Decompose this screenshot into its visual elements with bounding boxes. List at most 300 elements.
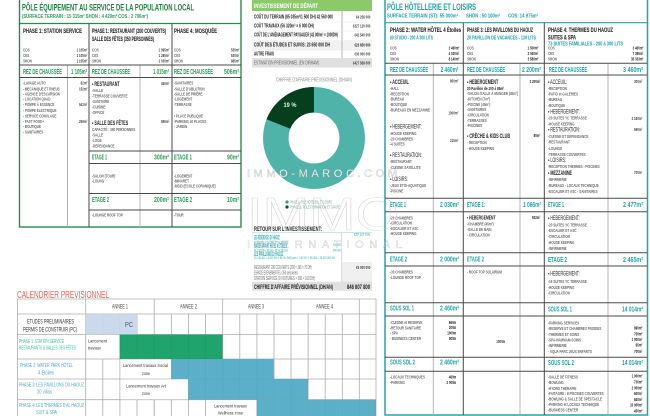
chart: chiffre d'affaire prévisionnel donut: 19 % (284, 103, 297, 109)
column: phase 1 restaurant et salle des fêtes: COS (92, 47, 99, 53)
column: phase 4 thermes du haouz (548, 27, 644, 414)
column: phase 4 mosquée: -MINARET (174, 178, 189, 184)
column: phase 4 thermes du haouz: 2 477m² (623, 202, 644, 209)
white merged note cells (120, 359, 257, 416)
row labels: SUIT & SPA (36, 410, 58, 416)
watermark: IMMO-MAROC.COM (247, 168, 397, 180)
column: phase 1 restaurant et salle des fêtes: -SANITAIRE (92, 98, 110, 104)
panel: retour sur investissement: STATION SERVICE (0 VOITURES × 365 × 100 DH) (254, 276, 315, 282)
column: phase 3 les pavillons du haouz: - CIRCULATION (467, 232, 490, 238)
column: phase 1 station service: COS (23, 47, 30, 53)
column: phase 2 water hôtel: CES (390, 50, 397, 56)
column: phase 4 thermes du haouz: -RESTAURANT (548, 139, 570, 145)
column: phase 4 mosquée (174, 26, 240, 218)
column: phase 2 water hôtel: 660m (449, 319, 457, 325)
panel: retour sur investissement: 20 VILLAS × 5 000 DH × 65 %× 365 jours + 130 000 + 65 000 = 30 000 000 DH (254, 256, 335, 260)
column: phase 2 water hôtel: 2 460m² (440, 67, 459, 74)
column: phase 1 restaurant et salle des fêtes: CAPACITÉ : 350 PERSONNES (92, 126, 136, 132)
column: phase 4 thermes du haouz: -HOUSE KEEPING (548, 284, 575, 290)
column: phase 2 water hôtel: SHON (390, 56, 399, 62)
column: phase 4 thermes du haouz: -RECEPTION (548, 85, 567, 91)
column: phase 1 station service (23, 28, 88, 135)
column: phase 1 station service: 1 105m² (71, 69, 87, 76)
column: phase 2 water hôtel: ETAGE 1 (390, 202, 406, 209)
legend: pôles (285, 198, 340, 210)
column: phase 2 water hôtel: 2 000m (447, 379, 457, 385)
panel: investissement de départ: €23 650 000 (354, 42, 371, 48)
panel: retour sur investissement: LES RÉSIDENCES DU HAOUZ: (254, 234, 280, 242)
panel: investissement de départ: €427 589 000 (353, 60, 371, 66)
column: phase 4 mosquée: CES (174, 52, 181, 58)
column: phase 1 station service: - FAST FOOD+ (23, 118, 45, 124)
column: phase 4 thermes du haouz: -PARKING SERVICES (548, 320, 579, 326)
column: phase 3 les pavillons du haouz: 2 040m² (528, 50, 539, 56)
column: phase 4 thermes du haouz: 73 SUITES FAMILIALES - 200 à 300 LITS (548, 42, 623, 48)
year headers: ANNEE 1 (112, 304, 128, 310)
panel: retour sur investissement: RESTAURANT 200 COUVERTS (200 × 365 × 70 DH) (254, 265, 312, 271)
column: phase 4 thermes du haouz: 840m² (634, 396, 643, 402)
column: phase 2 water hôtel: - BUSINESS CENTER (390, 335, 421, 341)
column: phase 4 thermes du haouz: -INFIRMERIE (548, 176, 567, 182)
column: phase 1 restaurant et salle des fêtes: 1 015m² (153, 69, 169, 76)
heading: pôle équipement: PÔLE ÉQUIPEMENT AU SERVICE DE LA POPULATION LOCAL (22, 2, 194, 12)
column: phase 1 restaurant et salle des fêtes (92, 28, 170, 218)
heading: calendrier: CALENDRIER PREVISIONNEL (17, 290, 109, 301)
column: phase 1 restaurant et salle des fêtes: 1 095m² (159, 47, 170, 53)
column: phase 4 thermes du haouz: ▪ HEBERGEMENT: (548, 109, 580, 116)
column: phase 4 mosquée: -SALLE DE PRIÈRE (174, 91, 203, 97)
panel: pôle équipement (20, 0, 241, 227)
panel: investissement de départ: €30 000 000 (354, 51, 371, 57)
column: phase 1 station service: SHON (23, 58, 32, 64)
column: phase 1 restaurant et salle des fêtes: -CUISINE (92, 104, 106, 110)
column: phase 4 thermes du haouz: 890m² (634, 325, 643, 331)
panel: retour sur investissement: ETP 10T TAN (354, 232, 370, 237)
column: phase 4 thermes du haouz: ETAGE 1 (548, 202, 564, 209)
column: phase 2 water hôtel: ETAGE 2 (390, 256, 407, 264)
column: phase 4 mosquée: 90m² (227, 154, 239, 162)
column: phase 4 thermes du haouz: -PARKING et LOCAUX TECHNIQUE (548, 401, 599, 407)
gantt notes: PC (125, 322, 133, 329)
gantt notes: Lancement travaux (214, 404, 247, 410)
heading: pôle hôtellerie (387, 1, 538, 20)
column: phase 4 thermes du haouz: -THERMES ET SOINS (548, 331, 579, 337)
column: phase 4 thermes du haouz: -CIRCULATION (548, 233, 570, 239)
column: phase 1 station service: CES (23, 52, 30, 58)
panel: investissement de départ: AUTRE FRAIS (254, 52, 274, 58)
column: phase 3 les pavillons du haouz: - ROOF TOP SOLARIUM (467, 269, 502, 275)
column: phase 2 water hôtel: -BUREAU (390, 96, 404, 102)
column: phase 2 water hôtel: -CUISINE et RESERVE (390, 319, 423, 325)
row labels: 4 Étoiles (38, 370, 54, 376)
column: phase 1 restaurant et salle des fêtes: ▪ SALLE DES FÊTES (92, 118, 129, 127)
panel: investissement de départ: €42 540 000 (354, 32, 371, 38)
column: phase 4 thermes du haouz: PHASE 4: THERMES DU HAOUZ (548, 27, 613, 34)
column: phase 2 water hôtel: 2 000m² (440, 256, 459, 264)
row labels: PHASE 3: LES PAVILLONS DU HAOUZ (19, 382, 84, 388)
column: phase 3 les pavillons du haouz: -SANITAIRES (467, 106, 487, 112)
panel: retour sur investissement: CHIFFRE D'AFFAIRE PRÉVISIONNEL (DH/AN) (254, 283, 333, 291)
column: phase 4 mosquée: - JARDIN (174, 123, 187, 129)
column: phase 2 water hôtel (390, 25, 461, 385)
row labels: PHASE 2: WATER PARK HÔTEL (20, 362, 73, 369)
column: phase 2 water hôtel: PHASE 2: WATER HÔTEL 4 Étoiles (390, 25, 461, 34)
panel: calendrier prévisionnel (17, 290, 376, 416)
column: phase 2 water hôtel: -BOUTIQUE (390, 101, 407, 107)
row labels: ETUDES PRELIMINAIRES (27, 320, 74, 326)
column: phase 4 mosquée: SHON (174, 58, 183, 64)
watermark: IMMO (247, 188, 399, 240)
column: phase 1 restaurant et salle des fêtes: -OFFICE (92, 109, 104, 115)
column: phase 1 restaurant et salle des fêtes: SHON (92, 58, 101, 64)
column: phase 4 thermes du haouz: -CIRCULATION (548, 290, 570, 296)
year headers: ANNEE 2 (180, 304, 197, 310)
column: phase 1 restaurant et salle des fêtes: CES (92, 52, 99, 58)
column: phase 4 thermes du haouz: 750m² (634, 331, 643, 337)
column: phase 2 water hôtel: 8 140m² (449, 56, 460, 62)
column: phase 3 les pavillons du haouz: ▪ HEBERGEMENT (467, 79, 498, 86)
column: phase 2 water hôtel: -BUREAUX EN MEZZANINE (390, 107, 430, 113)
gantt grid (18, 299, 376, 416)
column: phase 1 station service: - AGENCE D'ESCARSION (23, 91, 60, 97)
column: phase 4 thermes du haouz: 600m² (634, 390, 643, 396)
column: phase 4 mosquée: -LOGEMENT (174, 96, 193, 102)
column: phase 1 station service: - BOUTIQUE (23, 123, 41, 129)
column: phase 3 les pavillons du haouz: -CIRCULATION (467, 112, 489, 118)
panel: retour sur investissement (252, 226, 372, 291)
year headers: ANNEE 4 (316, 304, 333, 310)
column: phase 2 water hôtel: -HOUSE KEEPING (390, 130, 417, 136)
watermark: INTERNATIONAL (247, 239, 402, 251)
column: phase 4 mosquée: ETAGE 1 (174, 154, 192, 162)
column: phase 1 restaurant et salle des fêtes: PHASE 1: RESTAURANT (200 COUVERTS) (92, 28, 166, 35)
row labels: PERMIS DE CONSTRUIR (PC) (23, 328, 77, 334)
column: phase 2 water hôtel: -HOUSE KEEPING (390, 230, 417, 236)
panel: investissement de départ: ESTIMATION PRÉVISIONNEL (EN DIRHAM) (254, 60, 319, 66)
column: phase 4 thermes du haouz: -CUISINE ET DEPENDANCE (548, 133, 589, 139)
column: phase 3 les pavillons du haouz: 1000m (496, 338, 506, 344)
year headers: ANNEE 3 (248, 304, 264, 310)
column: phase 1 restaurant et salle des fêtes: 2 030m² (159, 58, 170, 64)
panel: retour sur investissement: 000 000 (333, 248, 341, 252)
column: phase 4 thermes du haouz: ▪ LOISIRS: (548, 157, 566, 164)
column: phase 4 mosquée: -LOGEMENT (174, 173, 193, 179)
column: phase 2 water hôtel: ▪ ACCEUIL (390, 79, 409, 86)
column: phase 4 thermes du haouz: ▪ ACCEUIL: (548, 79, 567, 86)
column: phase 4 mosquée: -TERRASSE (174, 101, 192, 107)
panel: retour sur investissement: LES PAVILLONS DU HAOUZ (254, 252, 283, 258)
column: phase 2 water hôtel: 2 460m² (449, 45, 460, 51)
legend: pôles: PHASE 1: PÔLE HOTELIER : ET LOISIRS (290, 198, 332, 204)
column: phase 4 thermes du haouz: -TERRASSE COUVERTES (548, 151, 586, 157)
column: phase 4 thermes du haouz: -20 SUITES YC TERRASSE (548, 222, 587, 228)
panel: investissement de départ: INVESTISSEMENT DE DÉPART (254, 1, 318, 10)
column: phase 1 station service: 542m² (79, 101, 88, 107)
column: phase 4 thermes du haouz: -BUREAU (548, 96, 562, 102)
column: phase 4 thermes du haouz: ▪ HEBERGEMENT: (548, 271, 580, 278)
column: phase 3 les pavillons du haouz: COS (467, 45, 474, 51)
column: phase 2 water hôtel: - SPA (390, 330, 398, 336)
column: phase 3 les pavillons du haouz: -SALLE DE BAIN (467, 226, 492, 232)
column: phase 4 thermes du haouz: 700m² (634, 348, 643, 354)
panel: investissement de départ: COÛT DU TERRAIN (85 035m²/1 500 DH) 42 560 000 (254, 14, 333, 20)
column: phase 4 mosquée: ETAGE 2 (174, 197, 192, 204)
column: phase 4 thermes du haouz: -BUSINESS CENTER (548, 407, 578, 413)
column: phase 3 les pavillons du haouz: -PISCINE (45m²) (467, 101, 491, 107)
column: phase 4 mosquée: -PARKING 40 PLACES (174, 118, 207, 124)
column: phase 1 restaurant et salle des fêtes: 450m² (161, 80, 170, 86)
column: phase 4 mosquée: -TOUR (174, 212, 184, 218)
column: phase 3 les pavillons du haouz: ▪ HEBERGEMENT (467, 215, 496, 221)
column: phase 2 water hôtel: -20 CHAMBRES (390, 136, 413, 142)
column: phase 1 restaurant et salle des fêtes: -TERRASSE COUVERTE (92, 93, 128, 99)
panel: retour sur investissement: 80 STUDIOS × 900 DH × 65 %× 365 jours (254, 248, 288, 252)
column: phase 2 water hôtel: -HALL (390, 85, 400, 91)
column: phase 1 station service: 259m² (79, 118, 88, 124)
row labels: PHASE 4: LES THERMES D'AL HAOUZ (19, 403, 84, 409)
column: phase 2 water hôtel: -RESTAURANT (390, 158, 412, 164)
column: phase 4 thermes du haouz: -SPA-HAMMAM-SOINS (548, 337, 581, 343)
column: phase 3 les pavillons du haouz: 1 066m² (523, 202, 541, 209)
column: phase 1 restaurant et salle des fêtes: 300m² (154, 154, 169, 162)
column: phase 4 thermes du haouz: SUITES & SPA (548, 34, 576, 42)
column: phase 1 restaurant et salle des fêtes: 1 285m² (159, 52, 170, 58)
column: phase 1 restaurant et salle des fêtes: ▪ RESTAURANT (92, 81, 120, 88)
panel: retour sur investissement: RETOUR SUR L'INVESTISSEMENT: (254, 226, 322, 233)
column: phase 3 les pavillons du haouz: CES (467, 50, 474, 56)
column: phase 4 thermes du haouz: 3 460m² (623, 67, 644, 74)
heading: pôle hôtellerie: SHON : 50 100m² (466, 12, 500, 20)
column: phase 1 restaurant et salle des fêtes: -LOGE (92, 137, 102, 143)
column: phase 4 thermes du haouz: -ESCALIER ET ASC - SANITAIRES (548, 188, 598, 194)
column: phase 4 mosquée: 10m² (227, 197, 239, 204)
column: phase 4 thermes du haouz: SOUS SOL 1 (548, 306, 572, 314)
column: phase 4 thermes du haouz: -SALLE DE FITNESS (548, 374, 578, 380)
column: phase 4 thermes du haouz: SOUS SOL 2 (548, 360, 574, 367)
column: phase 2 water hôtel: ▪ LOISIRS: (390, 176, 408, 183)
gantt notes: Lancement travaux Art (126, 384, 167, 390)
column: phase 3 les pavillons du haouz: REZ DE CHAUSSÉE (467, 65, 505, 74)
column: phase 3 les pavillons du haouz: ETAGE 1: (467, 202, 485, 209)
heading: pôle hôtellerie: SURFACE TERRAIN (ST): 55 000m² (387, 12, 458, 20)
chart: chiffre d'affaire prévisionnel donut (266, 76, 352, 176)
column: phase 1 station service: 1 105m² (77, 47, 88, 53)
column: phase 4 thermes du haouz: ▪ RESTAURATION: (548, 127, 580, 134)
column: phase 3 les pavillons du haouz: 932m² (532, 214, 541, 220)
column: phase 1 restaurant et salle des fêtes: -SALON (TOUR) (92, 173, 116, 179)
column: phase 2 water hôtel: 200m (449, 324, 457, 330)
column: phase 4 thermes du haouz: 450m² (634, 408, 643, 414)
column: phase 2 water hôtel: ▪ RESTAURATION: (390, 152, 422, 159)
column: phase 2 water hôtel: -RECEPTION (390, 91, 409, 97)
column: phase 2 water hôtel: 800m² (450, 78, 459, 84)
panel: investissement de départ: €4 256 000 (356, 14, 371, 20)
column: phase 3 les pavillons du haouz: - HOUSE KEEPING (467, 145, 494, 151)
column: phase 3 les pavillons du haouz: 2 200m² (522, 67, 541, 74)
column: phase 1 restaurant et salle des fêtes: -DEPENDANCE (92, 143, 115, 149)
column: phase 4 thermes du haouz: -BUREAUX - LOCAUX TECHNIQUE (548, 182, 599, 188)
column: phase 4 thermes du haouz: 35 333m² (631, 56, 644, 62)
column: phase 3 les pavillons du haouz: -CHAMBRE (45m²) (467, 221, 494, 227)
column: phase 3 les pavillons du haouz (467, 27, 541, 344)
column: phase 2 water hôtel: 2 030m² (440, 202, 459, 209)
column: phase 4 mosquée: 885m² (231, 58, 240, 64)
gantt bars (86, 314, 376, 416)
column: phase 4 thermes du haouz: ETAGE 2 (548, 257, 567, 264)
column: phase 4 thermes du haouz: 2 180m² (632, 115, 643, 121)
gantt notes: zone (142, 392, 150, 397)
column: phase 4 thermes du haouz: -FAITAGRE : 8 PISCINES COUVERTES (548, 390, 604, 396)
column: phase 4 thermes du haouz: ▪ HEBERGEMENT: (548, 215, 580, 222)
column: phase 2 water hôtel: 500m (449, 335, 457, 341)
column: phase 3 les pavillons du haouz: -TERRASSES (467, 117, 487, 123)
column: phase 4 thermes du haouz: -BOWLING & SALLE DE SPECTACLE (548, 396, 602, 402)
column: phase 4 thermes du haouz: -HYDRO THÉRAPIE (548, 385, 577, 391)
column: phase 2 water hôtel: SOUS SOL 1 (390, 306, 414, 312)
column: phase 4 thermes du haouz: -16 SUITES YC TERRASSE (548, 278, 587, 284)
column: phase 2 water hôtel: -LOCAUX TECHNIQUES (390, 374, 425, 380)
column: phase 2 water hôtel: ▪ HEBERGEMENT: (390, 124, 422, 131)
column: phase 4 thermes du haouz: -INFIRMERIE (548, 342, 567, 348)
column: phase 4 thermes du haouz: COS (548, 45, 555, 51)
panel: retour sur investissement: 80 STUDIOS × 700 DH × 65 %× 365 jours (254, 240, 288, 244)
column: phase 4 thermes du haouz: 7 395m² (633, 50, 644, 56)
column: phase 2 water hôtel: 80 STUDIO - 200 À 300 LITS (390, 34, 433, 42)
column: phase 2 water hôtel: -CUISINE SATELLITE (390, 164, 421, 170)
column: phase 1 restaurant et salle des fêtes: 585m² (161, 118, 170, 124)
column: phase 3 les pavillons du haouz: 20 Pavillon de 100 à 85m² (467, 85, 505, 91)
column: phase 4 thermes du haouz: - AQUA PARC JEUX ENFANTS (548, 348, 592, 354)
column: phase 4 mosquée: -MSID (ECOLE CORANIQUE) (174, 183, 216, 189)
row labels (19, 320, 84, 416)
column: phase 4 thermes du haouz: -HOUSE KEEPING (548, 121, 575, 127)
column: phase 3 les pavillons du haouz: 1 500m² (528, 45, 539, 51)
column: phase 3 les pavillons du haouz: -PISCINES (467, 122, 483, 128)
gantt notes: Lancement (88, 338, 108, 344)
column: phase 4 thermes du haouz: 700m² (634, 169, 643, 175)
column: phase 1 station service: - LOCATION QUAD (23, 96, 51, 102)
column: phase 4 thermes du haouz: 10 000m² (630, 402, 643, 408)
column: phase 4 thermes du haouz: 300m² (634, 78, 643, 84)
column: phase 2 water hôtel: 2 460m² (440, 360, 459, 366)
column: phase 1 station service: 1 105m² (77, 58, 88, 64)
column: phase 4 thermes du haouz: -BOWLING (548, 379, 564, 385)
heading: pôle hôtellerie: PÔLE HÔTELLERIE ET LOISIRS (387, 1, 476, 13)
column: phase 1 restaurant et salle des fêtes: ETAGE 2 (92, 197, 109, 204)
column: phase 2 water hôtel: REZ DE CHAUSSÉE (390, 65, 428, 74)
panel: pôle hôtellerie et loisirs (385, 0, 648, 415)
column: phase 3 les pavillons du haouz: 80m² (534, 132, 541, 138)
column: phase 2 water hôtel: COS (390, 45, 397, 51)
column: phase 4 thermes du haouz: 65m² (636, 342, 643, 348)
column: phase 1 station service: - POMPE À ESSENCE (23, 101, 55, 107)
column: phase 4 thermes du haouz: 1 000m² (632, 336, 643, 342)
column: phase 3 les pavillons du haouz: - RECEPTION (467, 139, 487, 145)
column: phase 1 station service: - POMPE ÉLECTRIQUE (23, 107, 57, 113)
column: phase 4 thermes du haouz: -LOUNGE (548, 145, 562, 151)
column: phase 2 water hôtel: -CIRCULATION (390, 220, 412, 226)
column: phase 4 thermes du haouz: -HOUSE KEEPING (548, 239, 575, 245)
column: phase 4 thermes du haouz: 2 465m² (623, 257, 644, 264)
column: phase 4 mosquée: 530m² (231, 47, 240, 53)
column: phase 4 thermes du haouz: -RECEPTION THERMES - PISCINES (548, 163, 600, 169)
column: phase 4 thermes du haouz: 1 000m² (632, 373, 643, 379)
column: phase 4 mosquée: -SALLE D'ABLUTION (174, 86, 205, 92)
column: phase 4 thermes du haouz: CES (548, 50, 555, 56)
column: phase 4 thermes du haouz: ▪ MEZZANINE (548, 170, 573, 177)
column: phase 4 thermes du haouz: -INFIRMERIE (548, 245, 567, 251)
panel: retour sur investissement: 846 807 800 (347, 285, 370, 291)
panel: investissement de départ: COÛT DE L'AMÉNAGEMENT PAYSAGER (42 000m² × 1000DH) (254, 30, 338, 38)
column: phase 2 water hôtel: 2 460m² (440, 306, 459, 312)
column: phase 3 les pavillons du haouz: 20 PAVILLON DE VACANCES - 130 LITS (467, 36, 536, 42)
column: phase 4 thermes du haouz: 2 000m² (632, 385, 643, 391)
panel: investissement de départ: COÛT TRAVAUX (56 320m² × 6 000 DH) (254, 22, 314, 30)
heading: pôle équipement: (SURFACE TERRAIN : 15 315m² SHON : 4 420m² COS : 2 706m²) (22, 13, 148, 20)
gantt notes (88, 322, 247, 416)
column: phase 4 thermes du haouz: -RESERVE ET CHAMBRES FROIDES (548, 325, 602, 331)
column: phase 1 restaurant et salle des fêtes: 200m² (154, 197, 169, 204)
column: phase 2 water hôtel: -ESCALIER ET ASC (390, 225, 419, 231)
column: phase 4 thermes du haouz: -ESCALIER ET ASC (548, 227, 577, 233)
column: phase 4 thermes du haouz: -BOUTIQUE (548, 102, 565, 108)
column: phase 1 restaurant et salle des fêtes: -SALLE (92, 87, 103, 93)
column: phase 4 thermes du haouz: 730m² (634, 379, 643, 385)
column: phase 3 les pavillons du haouz: 3 580m² (528, 56, 539, 62)
column: phase 1 restaurant et salle des fêtes: -SALLE (92, 132, 103, 138)
panel: retour sur investissement: WATER APPART HÔTEL 4 ÉTOILES (254, 242, 287, 250)
panel: retour sur investissement: 000 000 (333, 243, 341, 247)
column: phase 2 water hôtel: -30 CHAMBRES (390, 269, 413, 275)
column: phase 1 station service: - SANITAIRES (23, 129, 43, 135)
column: phase 2 water hôtel: 215m² (450, 137, 459, 143)
column: phase 4 thermes du haouz: -20 SUITES YC TERRASSE (548, 115, 587, 121)
column: phase 1 station service: -LAVAGE AUTO (23, 80, 46, 86)
column: phase 3 les pavillons du haouz: 2 200m² (530, 78, 541, 84)
row labels: RESTAURANTS & SALLES DES FÊTES (19, 344, 76, 352)
column: phase 4 thermes du haouz: 3 460m² (633, 45, 644, 51)
column: phase 2 water hôtel: -PARKING (390, 379, 405, 385)
column: phase 1 station service: 1 105m² (77, 52, 88, 58)
column: phase 1 restaurant et salle des fêtes: REZ DE CHAUSSÉE (92, 67, 130, 76)
heading: pôle hôtellerie: COS: 14 975m² (508, 12, 538, 20)
column: phase 2 water hôtel: 1000m (447, 330, 457, 336)
column: phase 1 station service: PHASE 1: STATION SERVICE (23, 28, 82, 35)
gantt notes: Lancement travaux Social (123, 363, 168, 369)
panel: investissement de départ (252, 0, 372, 68)
column: phase 4 thermes du haouz: -PATIO et GALERIES (548, 91, 578, 97)
panel: retour sur investissement: €5 000 000 (356, 264, 371, 270)
column: phase 2 water hôtel: SOUS SOL 2 (390, 360, 415, 366)
column: phase 2 water hôtel: -LOUNGE ROOF TOP (390, 274, 421, 280)
column: phase 2 water hôtel: 1000m² (448, 110, 459, 116)
column: phase 1 restaurant et salle des fêtes: -LOUNG (92, 178, 104, 184)
column: phase 1 station service: - MECANIQUE ET PNEUS (23, 86, 60, 92)
column: phase 4 mosquée: REZ DE CHAUSSÉE (174, 67, 213, 76)
column: phase 1 restaurant et salle des fêtes: -LOUNGE ROOF TOP (92, 212, 123, 218)
column: phase 1 restaurant et salle des fêtes: ETAGE 1 (92, 154, 107, 162)
column: phase 3 les pavillons du haouz: ▪ CRÈCHE & KIDS CLUB (467, 131, 510, 140)
column: phase 3 les pavillons du haouz: PHASE 3: LES PAVILLONS DU HAOUZ (467, 27, 533, 34)
column: phase 1 restaurant et salle des fêtes: SALLE DES FÊTES (350 PERSONNES) (92, 34, 154, 43)
chart: chiffre d'affaire prévisionnel donut: CHIFFRE D'AFFAIRE PRÉVISIONNEL (DH/AN) (276, 76, 352, 84)
column: phase 4 thermes du haouz: SHON (548, 56, 557, 62)
column: phase 2 water hôtel: 460m (449, 374, 457, 380)
panel: retour sur investissement: ESPACE ÉVÈNEMENTIEL (350 personnes) (254, 270, 298, 276)
column: phase 4 mosquée: ▪ PLACE PUBLIQUE (174, 113, 203, 119)
heading: pôle équipement (22, 2, 194, 20)
panel: investissement de départ: €327 120 000 (353, 23, 371, 29)
